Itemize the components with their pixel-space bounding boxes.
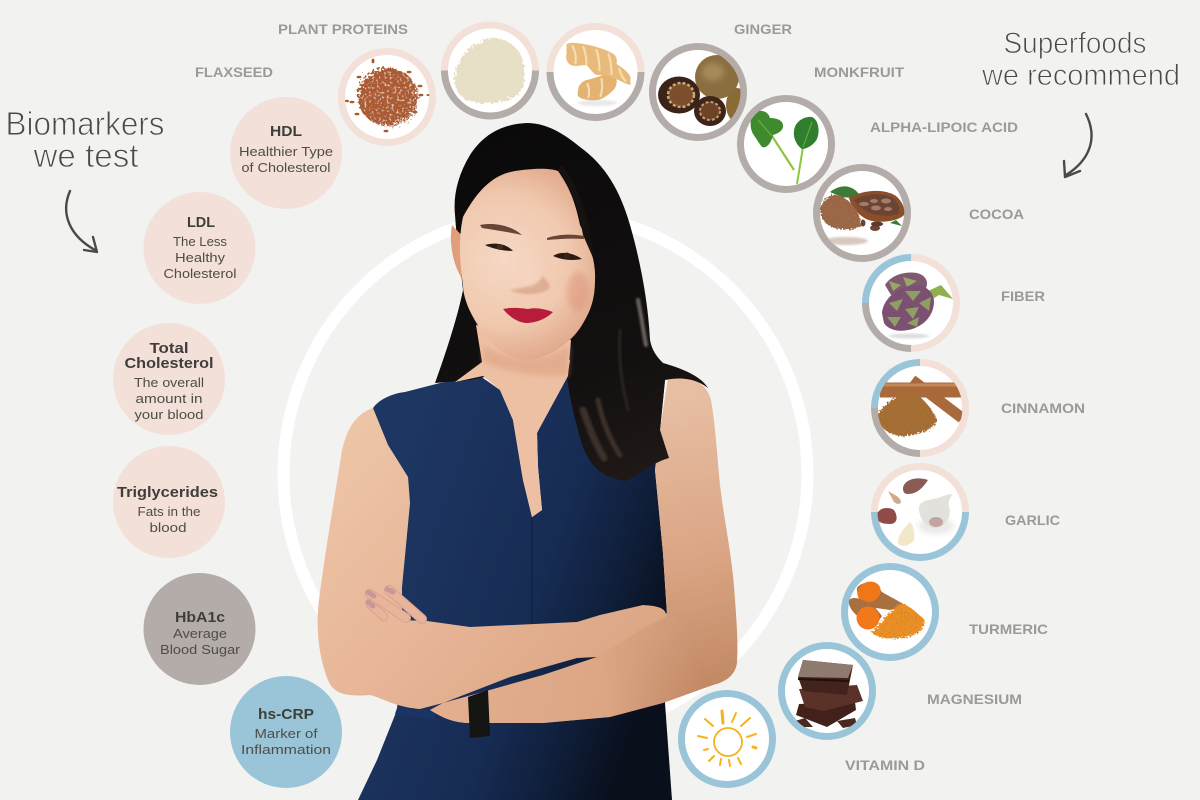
food labels: CINNAMON (1001, 401, 1085, 416)
biomarker: hs-CRP: Inflammation (241, 742, 331, 757)
biomarker: LDL: LDL (187, 214, 215, 231)
white ring behind portrait (284, 212, 808, 736)
belt edge (395, 708, 436, 720)
biomarker: total cholesterol: amount in (136, 391, 202, 406)
fingers (368, 589, 422, 619)
face (460, 169, 595, 360)
heading: superfoods we recommend (981, 27, 1180, 92)
food: fiber artichoke (866, 258, 956, 348)
biomarker: triglycerides: Triglycerides (117, 484, 218, 501)
biomarker: total cholesterol (113, 323, 225, 435)
food: garlic (874, 466, 966, 558)
food labels: TURMERIC (969, 622, 1048, 637)
biomarker: total cholesterol: Cholesterol (124, 355, 214, 372)
heading: biomarkers we test: we test (32, 137, 138, 174)
biomarker: total cholesterol: your blood (134, 407, 204, 422)
biomarker: HbA1c: Average (173, 626, 227, 641)
food labels (195, 22, 1085, 773)
biomarker: hs-CRP: Marker of (254, 726, 318, 741)
arrow: superfoods (1064, 114, 1092, 177)
biomarker: triglycerides: Fats in the (138, 504, 200, 519)
hair highlights (583, 300, 646, 458)
biomarker: hs-CRP (230, 676, 342, 788)
biomarker: HDL: HDL (270, 123, 302, 140)
biomarker: HDL: Healthier Type (239, 144, 333, 159)
heading: biomarkers we test: Biomarkers (6, 105, 164, 142)
food: turmeric (844, 566, 936, 658)
food: magnesium dark chocolate (782, 646, 872, 736)
food labels: GARLIC (1005, 513, 1060, 528)
food: cinnamon (874, 362, 966, 454)
food: alpha-lipoic acid spinach (740, 98, 832, 190)
biomarker: HbA1c: HbA1c (175, 609, 225, 626)
food: vitamin D sun icon (682, 694, 772, 784)
biomarker: HDL (230, 97, 342, 209)
biomarker: LDL: Healthy (175, 250, 226, 265)
heading: superfoods we recommend: we recommend (981, 59, 1180, 92)
left upper arm (318, 408, 420, 680)
dress (358, 373, 672, 800)
food labels: VITAMIN D (845, 758, 925, 773)
biomarker: total cholesterol: Total (150, 340, 188, 357)
neck shadow (483, 345, 570, 376)
ear (451, 225, 466, 277)
biomarker: triglycerides (113, 446, 225, 558)
hairline strand over temple (558, 165, 594, 260)
food: plant proteins (444, 25, 536, 116)
food: monkfruit (652, 46, 748, 138)
biomarker: HbA1c (144, 573, 256, 685)
food: flaxseed (342, 52, 432, 142)
biomarker: hs-CRP: hs-CRP (258, 706, 314, 723)
arrow: biomarkers (66, 191, 97, 252)
neck and chest (455, 325, 571, 517)
lower forearm tone (430, 613, 713, 723)
biomarker: LDL: Cholesterol (164, 266, 237, 281)
food labels: ALPHA-LIPOIC ACID (870, 120, 1018, 135)
nose (510, 265, 550, 294)
lips (503, 308, 553, 323)
food: cocoa (816, 168, 908, 258)
biomarker: HDL: of Cholesterol (242, 160, 331, 175)
food: ginger (550, 26, 641, 118)
food labels: COCOA (969, 207, 1024, 222)
portrait of woman with crossed arms (318, 123, 737, 800)
watch band (468, 690, 490, 738)
biomarker: LDL: The Less (173, 234, 227, 249)
biomarker: HbA1c: Blood Sugar (160, 642, 241, 657)
food labels: FLAXSEED (195, 65, 273, 80)
food labels: FIBER (1001, 289, 1045, 304)
dress centre seam (531, 518, 533, 625)
right arm with lower forearm (430, 377, 737, 723)
heading: superfoods we recommend: Superfoods (1004, 27, 1146, 60)
eyebrows (480, 224, 584, 240)
food labels: MAGNESIUM (927, 692, 1022, 707)
food labels: PLANT PROTEINS (278, 22, 408, 37)
heading: biomarkers we test (6, 105, 164, 174)
cheek blush (567, 272, 589, 312)
biomarker: triglycerides: blood (150, 520, 186, 535)
food labels: MONKFRUIT (814, 65, 905, 80)
food labels: GINGER (734, 22, 792, 37)
biomarker: total cholesterol: The overall (134, 375, 204, 390)
upper forearm with hand (318, 596, 666, 709)
eyes (485, 244, 582, 260)
hair (435, 123, 708, 481)
biomarker: LDL (144, 192, 256, 304)
